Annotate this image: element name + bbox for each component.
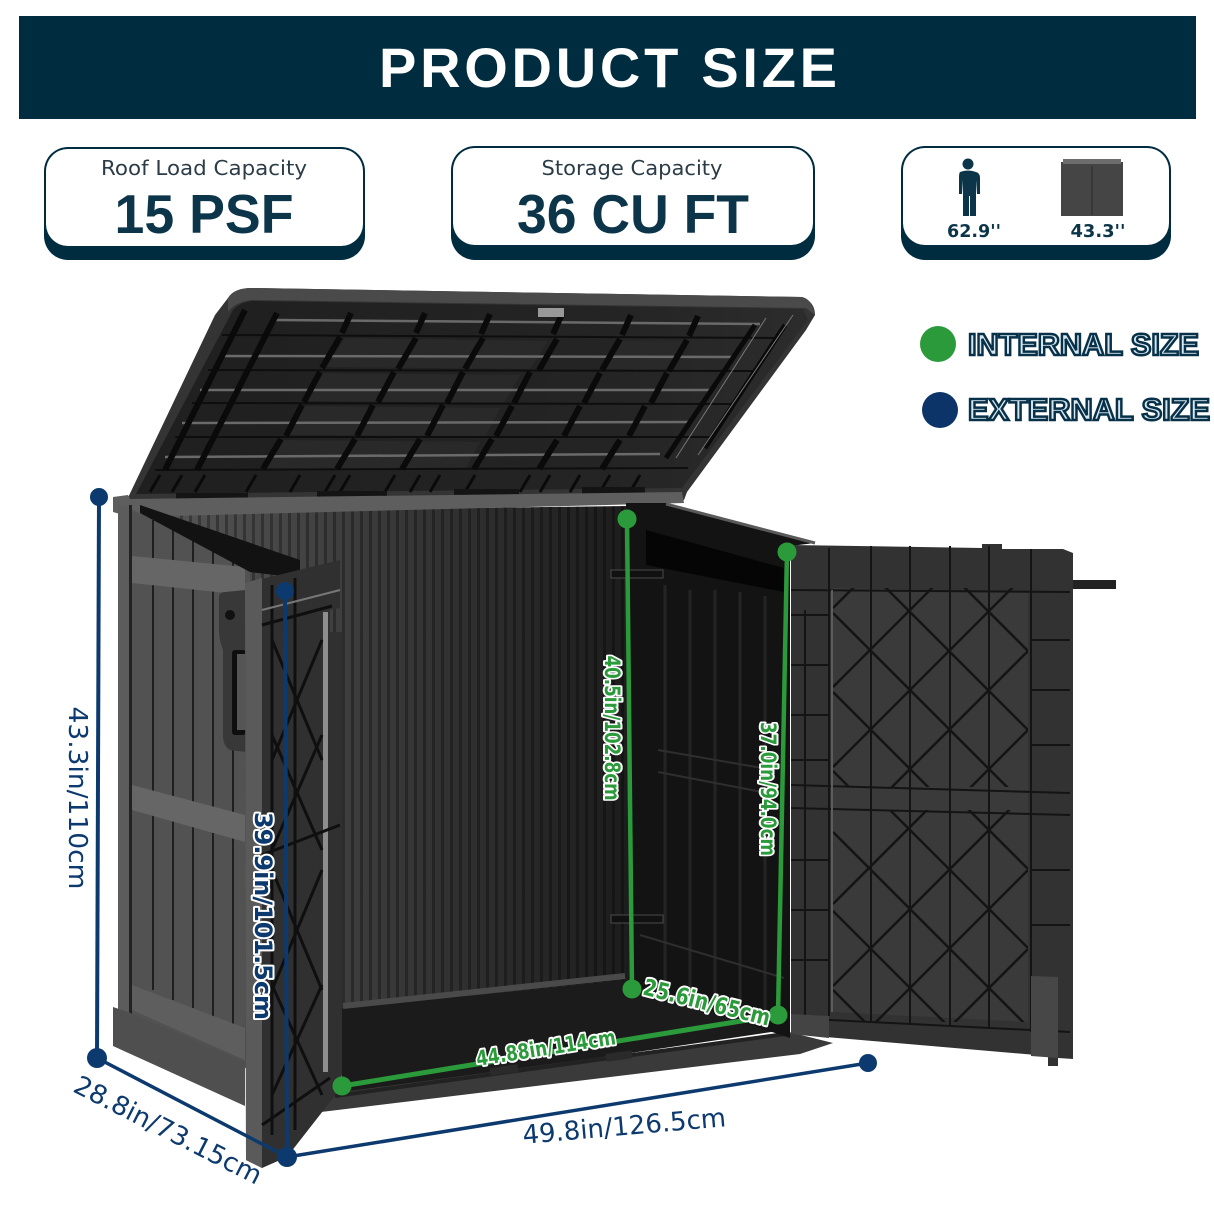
left side wall	[113, 505, 300, 1106]
title banner: PRODUCT SIZE	[379, 36, 837, 99]
icon: person	[959, 158, 980, 216]
card: storage capacity: Storage Capacity	[542, 156, 723, 180]
internal height dimension line B	[768, 542, 796, 1024]
external depth dimension line	[97, 1058, 287, 1157]
legend: external size: EXTERNAL SIZE	[968, 392, 1210, 427]
label: internal width: 44.88in/114cm	[474, 1025, 617, 1071]
lid bottom teeth	[150, 475, 640, 492]
card: roof load capacity: 15 PSF	[114, 183, 294, 245]
shed lid	[125, 288, 815, 504]
label: internal height B: 37.0in/94.0cm	[756, 722, 780, 856]
icon: mini shed	[1061, 159, 1123, 216]
card: roof load capacity	[44, 147, 365, 260]
left open door	[245, 560, 342, 1168]
lid rib wedges	[165, 310, 785, 470]
side handle	[219, 590, 246, 752]
label: external width: 49.8in/126.5cm	[521, 1103, 727, 1151]
card: height comparison	[901, 146, 1171, 260]
right open door	[790, 544, 1116, 1066]
card: roof load capacity: Roof Load Capacity	[101, 156, 307, 180]
external height dimension line	[87, 488, 108, 1068]
internal width dimension line	[332, 1015, 778, 1096]
label: door height: 39.9in/101.5cm	[249, 812, 277, 1020]
legend: internal size: INTERNAL SIZE	[968, 327, 1199, 362]
back wall	[130, 506, 632, 1008]
top frame	[113, 492, 684, 517]
external width dimension line	[287, 1054, 877, 1157]
card: storage capacity	[451, 146, 815, 260]
title banner	[19, 16, 1196, 119]
card: storage capacity: 36 CU FT	[517, 183, 749, 245]
internal height dimension line A	[618, 510, 642, 998]
card: height comparison: 62.9''	[947, 221, 1001, 242]
label: external height: 43.3in/110cm	[62, 706, 92, 890]
floor	[321, 976, 833, 1112]
card: height comparison: 43.3''	[1070, 221, 1126, 242]
label: external depth: 28.8in/73.15cm	[69, 1071, 267, 1191]
door height dimension line	[276, 582, 297, 1167]
storage shed photo	[113, 288, 1116, 1214]
label: internal height A: 40.5in/102.8cm	[600, 656, 624, 800]
label: internal depth: 25.6in/65cm	[640, 975, 773, 1032]
right side interior	[611, 503, 815, 1038]
